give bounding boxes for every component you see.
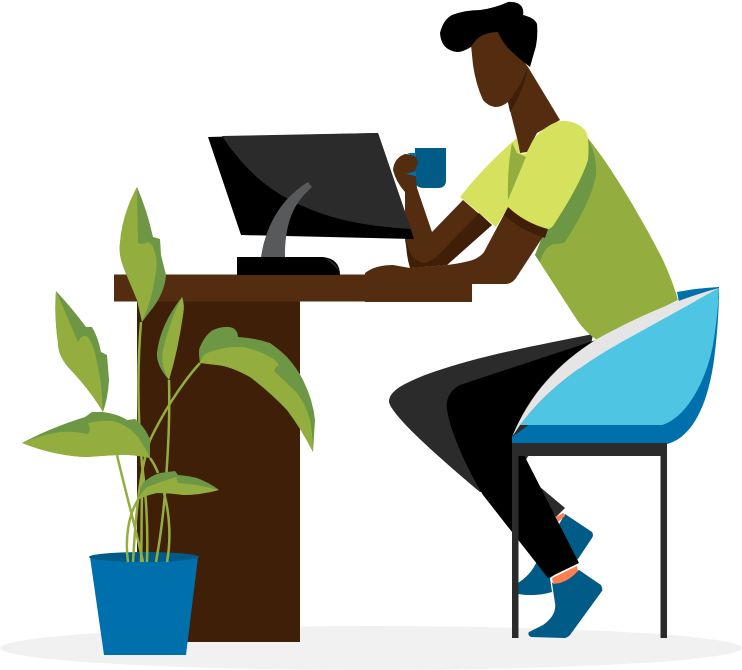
leaf: large right: [199, 327, 315, 452]
back foot: [518, 513, 593, 595]
shirt sleeve and collar: [460, 121, 589, 229]
leaf: top: [120, 187, 166, 322]
plant stems: [117, 322, 200, 562]
chair cushion: [512, 288, 719, 444]
back leg and thigh: [389, 334, 593, 517]
ground shadow: [0, 626, 742, 670]
leaf: small lower: [138, 471, 219, 500]
hair: [440, 2, 537, 67]
chair back edge: [677, 287, 719, 302]
monitor: [208, 133, 414, 275]
face: [471, 27, 528, 107]
leaf: left upper: [55, 291, 109, 412]
shirt body: [535, 137, 678, 340]
plant pot: [89, 552, 199, 655]
front leg: [447, 340, 596, 578]
plant: [22, 187, 315, 655]
far arm with hand: [405, 188, 492, 268]
leaf: left horizontal: [22, 412, 150, 458]
front foot: [528, 566, 602, 638]
coffee mug: [415, 148, 446, 188]
chair frame: [512, 443, 667, 638]
near arm: [365, 207, 548, 302]
leaf: narrow centre: [157, 297, 184, 380]
hand holding mug: [393, 154, 418, 192]
desk: [114, 274, 472, 642]
neck: [508, 67, 560, 153]
mug handle: [406, 153, 416, 176]
